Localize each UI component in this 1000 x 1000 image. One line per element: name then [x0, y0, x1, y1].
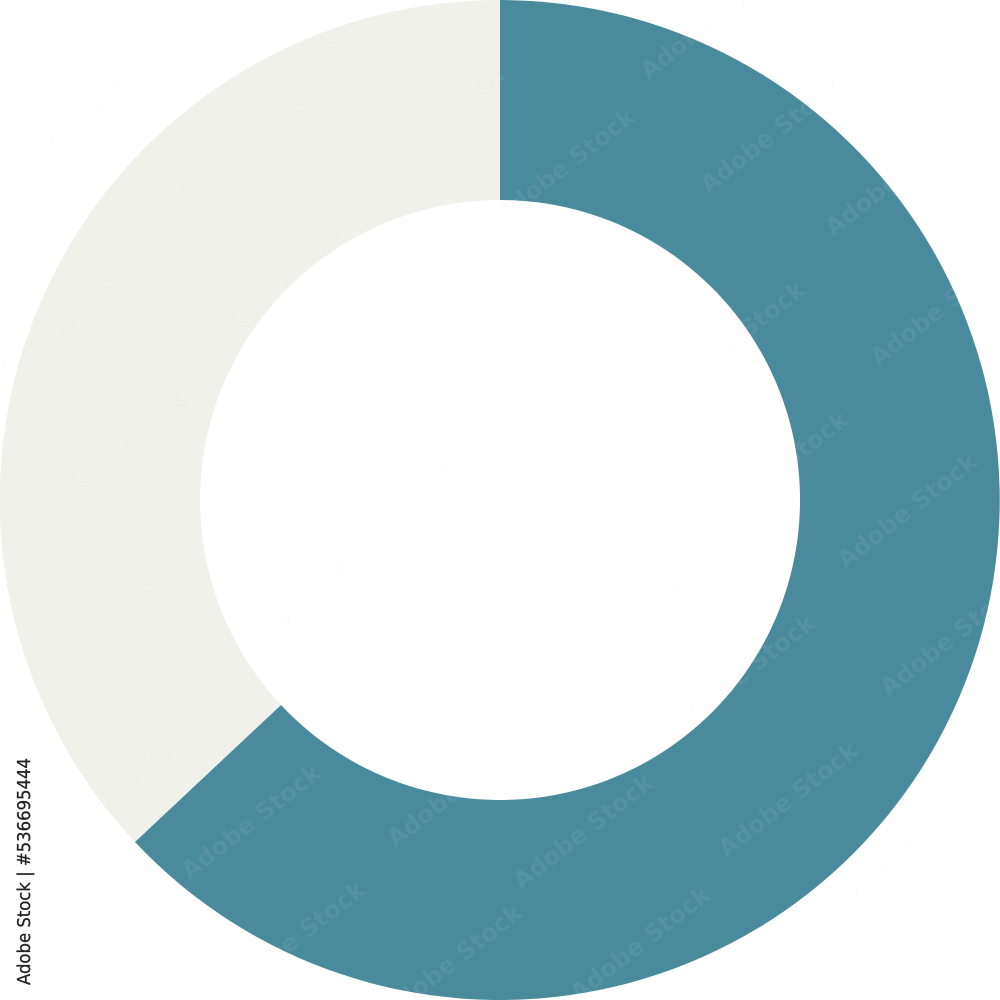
watermark pattern: Adobe Stock	[220, 875, 371, 1000]
watermark pattern: Adobe Stock	[176, 758, 327, 885]
watermark pattern: Adobe Stock	[713, 736, 864, 863]
watermark pattern: Adobe Stock	[542, 565, 693, 692]
watermark pattern: Adobe Stock	[695, 72, 846, 199]
side credit label: Adobe Stock | #536695444	[14, 758, 35, 985]
watermark pattern: Adobe Stock	[840, 778, 991, 905]
watermark pattern: Adobe Stock	[212, 552, 363, 679]
watermark pattern: Adobe Stock	[5, 575, 156, 702]
watermark pattern: Adobe Stock	[372, 395, 523, 522]
watermark pattern: Adobe Stock	[338, 598, 489, 725]
watermark pattern: Adobe Stock	[40, 385, 191, 512]
watermark pattern: Adobe Stock	[832, 447, 983, 574]
watermark pattern: Adobe Stock	[703, 405, 854, 532]
watermark pattern: Adobe Stock	[508, 768, 659, 895]
watermark pattern: Adobe Stock	[498, 435, 649, 562]
watermark pattern: Adobe Stock	[530, 238, 681, 365]
watermark pattern: Adobe Stock	[168, 425, 319, 552]
watermark pattern: Adobe Stock	[382, 726, 533, 853]
watermark pattern: Adobe Stock	[660, 275, 811, 402]
watermark pattern: Adobe Stock	[328, 265, 479, 392]
watermark pattern: Adobe Stock	[200, 225, 351, 352]
watermark pattern: Adobe Stock	[490, 102, 641, 229]
watermark pattern: Adobe Stock	[30, 40, 181, 167]
watermark pattern: Adobe Stock	[820, 115, 971, 242]
watermark pattern: Adobe Stock	[157, 95, 308, 222]
watermark pattern: Adobe Stock	[360, 60, 511, 187]
watermark pattern: Adobe Stock	[50, 718, 201, 845]
segment: remaining share (light)	[0, 0, 500, 842]
watermark pattern: Adobe Stock	[670, 608, 821, 735]
